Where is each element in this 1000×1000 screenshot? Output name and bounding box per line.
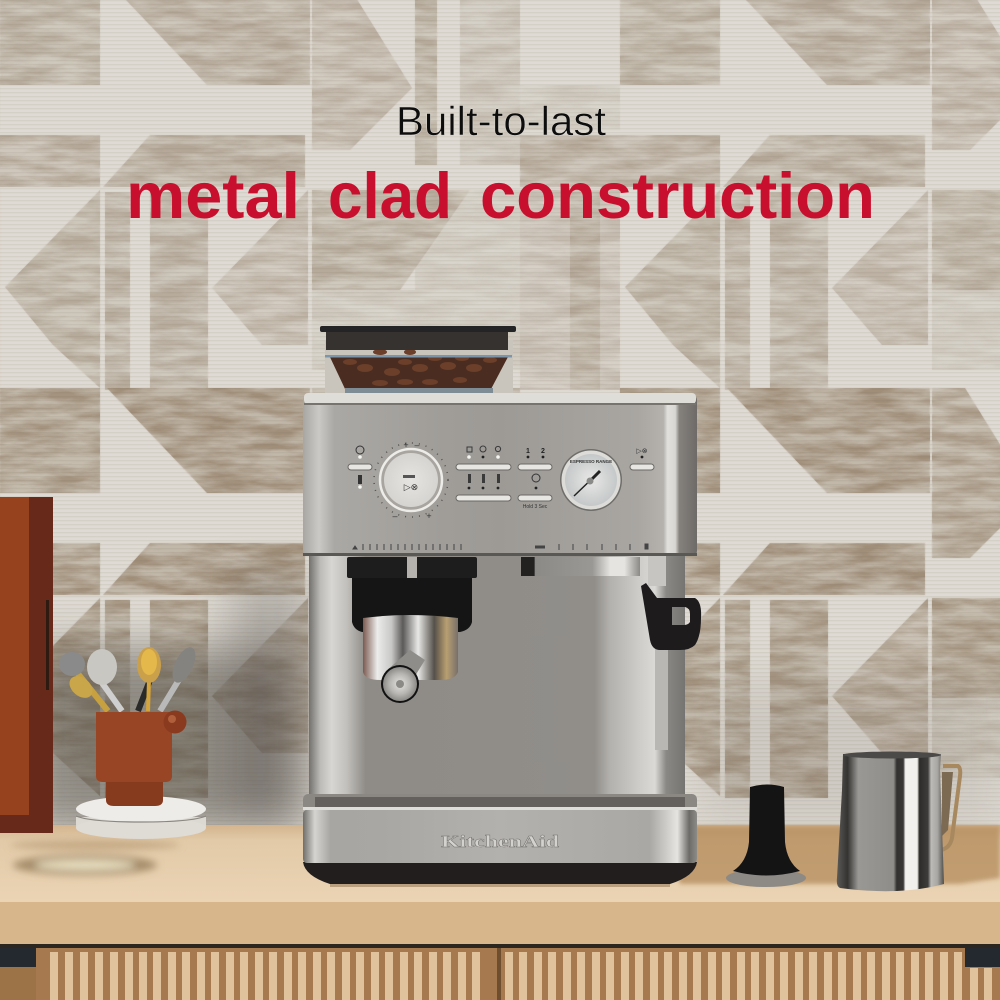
spoons	[59, 644, 200, 711]
lower body	[309, 553, 685, 798]
wall shadow lower right	[700, 680, 1000, 830]
buttons: small	[518, 448, 552, 510]
water outlet	[521, 557, 640, 576]
dial: +	[403, 440, 409, 450]
heading: metal clad construction: construction	[480, 159, 875, 232]
heading: Built-to-last: Built-to-last	[396, 98, 607, 144]
water level ticks	[353, 544, 648, 550]
counter top	[0, 825, 1000, 948]
button: power	[348, 446, 372, 489]
steam wand	[641, 556, 701, 750]
right counter shadow	[660, 826, 1000, 884]
terracotta cup	[96, 710, 186, 806]
dial: +	[426, 511, 432, 521]
buttons: small: 2	[541, 448, 545, 455]
head panel	[303, 393, 697, 556]
cabinet clip left	[0, 948, 36, 967]
milk pitcher	[837, 752, 960, 891]
dial: –	[414, 440, 420, 450]
wall shadow lower left	[30, 580, 310, 830]
dial: –	[392, 511, 398, 521]
heading: metal clad construction: clad	[328, 159, 452, 232]
logo: KitchenAid	[441, 832, 560, 851]
portafilter	[363, 615, 458, 703]
button: start: ▷⊗	[636, 447, 648, 455]
bean hopper	[320, 326, 516, 394]
dial	[374, 440, 448, 521]
heading: metal clad construction: metal	[126, 159, 300, 232]
heading: metal clad construction	[126, 159, 875, 232]
marble coasters	[76, 796, 206, 839]
tamper	[726, 784, 806, 887]
ribbed cabinet	[0, 948, 1000, 1000]
counter shadow rings	[10, 840, 180, 875]
dial: ▷⊗	[404, 483, 418, 493]
buttons: small: Hold 3 Sec	[523, 504, 548, 510]
drip tray	[303, 794, 697, 887]
group head	[347, 557, 477, 632]
title	[126, 98, 875, 232]
wooden box	[0, 497, 53, 833]
pressure gauge: ESPRESSO RANGE	[570, 459, 612, 464]
buttons: small: 1	[526, 448, 530, 455]
buttons: wide	[456, 446, 511, 501]
button: start	[630, 447, 654, 470]
cabinet clip right	[965, 948, 1000, 967]
coffee machine	[303, 326, 701, 887]
pressure gauge	[560, 449, 622, 511]
